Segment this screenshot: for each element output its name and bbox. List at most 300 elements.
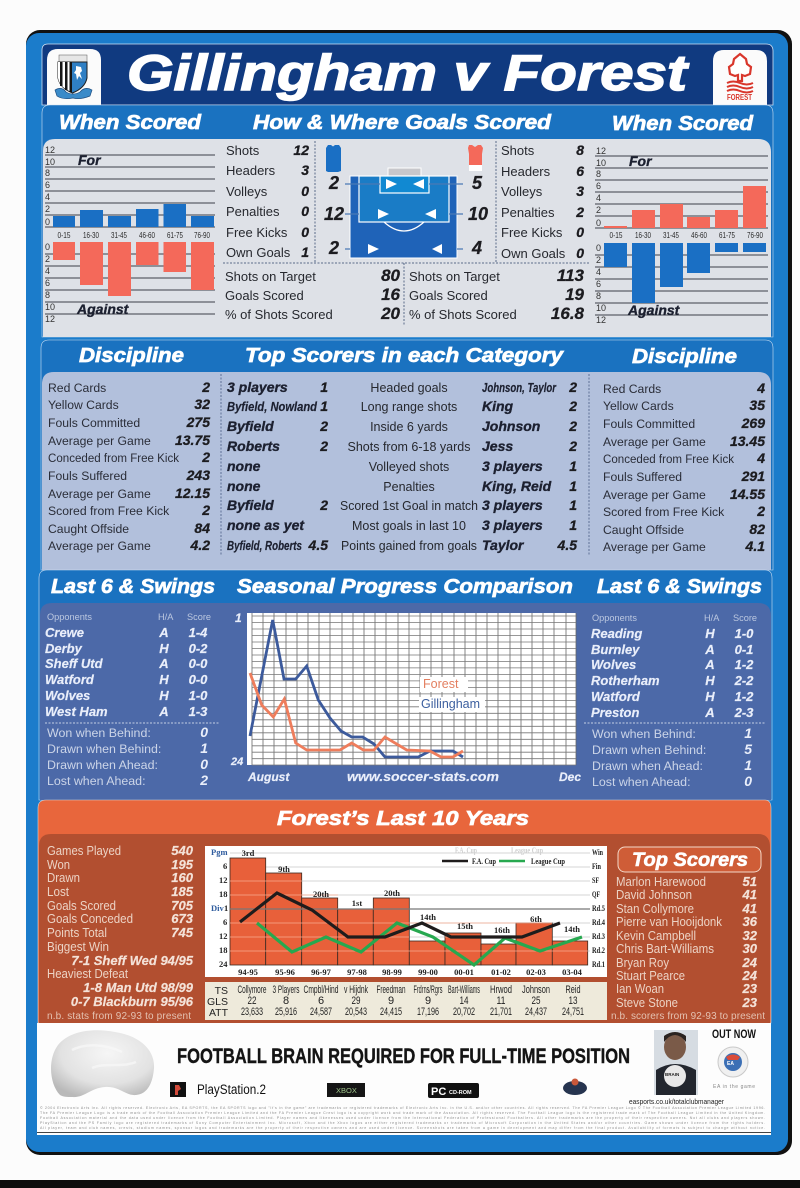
table: top scorers Gillingham: 1	[320, 379, 328, 395]
table: top scorers Gillingham: none	[227, 458, 261, 474]
table: top scorers Forest: 2	[568, 398, 577, 414]
bar chart: Forest when scored: 2	[596, 255, 601, 265]
table: Forest last 6: Won when Behind:	[592, 727, 696, 741]
table: Gillingham discipline: 2	[201, 449, 210, 465]
table: top scorers Forest: 1	[569, 458, 577, 474]
chart: league position and cup progress: SF	[592, 875, 599, 885]
panel: how and where goals scored	[42, 105, 773, 337]
table: Gillingham discipline: Yellow Cards	[48, 398, 119, 412]
table: Gillingham last 6: West Ham	[45, 704, 108, 719]
table: Forest last 6: A	[704, 657, 715, 672]
table: season top scorer, goals, attendance: 24,751	[562, 1006, 584, 1018]
table: Gillingham last 6: Lost when Ahead:	[47, 774, 146, 788]
chart: league position and cup progress: Pgm	[211, 847, 228, 857]
heading: last 6 right: Last 6 & Swings	[597, 576, 762, 598]
chart: league position and cup progress: 3rd	[242, 848, 255, 858]
table: Forest how scored: 0	[576, 224, 584, 240]
table: Gillingham how scored: 12	[293, 142, 309, 158]
chart: league position and cup progress: Fin	[592, 861, 601, 871]
table: Gillingham last 6: Watford	[45, 672, 95, 687]
table: shots totals Forest: 113	[557, 266, 585, 285]
table: Forest last 6: 1-2	[735, 689, 754, 704]
table: all-time top scorers	[611, 847, 765, 1022]
legend: Forest	[420, 677, 468, 692]
table: top scorers Forest: 2	[568, 379, 577, 395]
table: top scorers Forest: 1	[569, 478, 577, 494]
table: Gillingham last 6: Crewe	[45, 625, 84, 640]
table: Gillingham how scored: Shots	[226, 143, 260, 158]
table: all-time top scorers: 36	[743, 914, 758, 929]
table: all-time top scorers: David Johnson	[616, 887, 692, 902]
table: Gillingham discipline: Caught Offside	[48, 522, 129, 536]
table: Forest discipline: 4.1	[745, 538, 765, 554]
table: season top scorer, goals, attendance: Johnson	[522, 984, 550, 996]
chart: league position and cup progress	[205, 845, 607, 977]
bar chart: Forest when scored: 4	[596, 267, 601, 277]
game box	[654, 1030, 698, 1095]
table: season top scorer, goals, attendance: 6	[318, 995, 324, 1007]
table: ten year stats: Goals Conceded	[47, 911, 133, 926]
legend: Gillingham: Gillingham	[421, 697, 480, 711]
heading: discipline right: Discipline	[632, 346, 737, 368]
table: season top scorer, goals, attendance: Collymore	[238, 984, 266, 996]
table: Forest last 6: 1-2	[735, 657, 754, 672]
table: Forest how scored: 3	[576, 183, 584, 199]
table: top scorers Forest: Johnson	[482, 418, 540, 434]
bar chart: Gillingham when scored: 8	[45, 168, 50, 178]
table: Gillingham last 6: Won when Behind:	[47, 726, 151, 740]
web address: easports.co.uk/totalclubmanager	[629, 1097, 724, 1106]
table: Gillingham last 6: Derby	[45, 641, 83, 656]
table: Gillingham discipline: 84	[194, 520, 210, 536]
table: ten year stats: 160	[171, 870, 194, 885]
table: top scorers Gillingham: 1	[320, 398, 328, 414]
table: Gillingham how scored: 1	[301, 244, 309, 260]
logo: Xbox	[327, 1083, 365, 1097]
icon: brain	[51, 1030, 154, 1097]
table: Forest discipline: Caught Offside	[603, 523, 684, 537]
bar chart: Forest when scored: 12	[596, 315, 606, 325]
table: Forest how scored: Own Goals	[501, 246, 566, 261]
table: Forest discipline: Scored from Free Kick	[603, 505, 725, 519]
table: Gillingham last 6: A	[158, 704, 169, 719]
logo: Xbox: XBOX	[336, 1086, 357, 1095]
table: Forest last 6: 5	[744, 741, 752, 757]
bar chart: Forest when scored: 61-75	[719, 231, 735, 240]
table: shots totals Forest: 16.8	[551, 304, 585, 323]
chart: league position and cup progress: 6	[223, 917, 227, 927]
table: Forest last 6: H	[705, 689, 715, 704]
table: Gillingham last 6: 0	[200, 756, 208, 772]
chart: league position and cup progress: 6	[223, 861, 227, 871]
bar chart: Forest when scored: 6	[596, 279, 601, 289]
chart: league position and cup progress: Win	[592, 847, 603, 857]
chart: league position and cup progress: 6th	[530, 914, 542, 924]
bar chart: Forest when scored: 10	[596, 303, 606, 313]
pitch diagram: 10	[468, 204, 488, 224]
table: Gillingham discipline: 13.75	[175, 432, 210, 448]
table: Forest how scored: Shots	[501, 143, 535, 158]
series: Forest	[250, 673, 463, 757]
table: Gillingham discipline: Fouls Committed	[48, 416, 140, 430]
table: Forest discipline: 13.45	[730, 433, 765, 449]
heading: when scored left: When Scored	[59, 112, 202, 134]
table: season top scorer, goals, attendance: Freedman	[376, 984, 406, 996]
chart: league position and cup progress: 02-03	[526, 967, 546, 977]
table: top scorers Gillingham: Byfield	[227, 497, 274, 513]
bar chart: Gillingham when scored: 10	[45, 157, 55, 167]
bar chart: Gillingham when scored: 12	[45, 314, 55, 324]
title banner	[42, 44, 773, 105]
chart: league position and cup progress: Rd.5	[592, 903, 605, 913]
bar chart: Gillingham when scored: 16-30	[83, 231, 99, 240]
chart: league position and cup progress: 20th	[313, 889, 329, 899]
crest: Gillingham	[47, 49, 101, 105]
heading: how and where: How & Where Goals Scored	[253, 112, 552, 134]
table: Gillingham last 6: Sheff Utd	[45, 656, 104, 671]
table: top scorers Forest: 1	[569, 497, 577, 513]
table: Forest discipline: 4	[756, 450, 765, 466]
table: season top scorer, goals, attendance: 25	[532, 995, 540, 1007]
table: Gillingham last 6: A	[158, 656, 169, 671]
legend: Forest: Forest	[423, 677, 459, 691]
table: season top scorer, goals, attendance: 21,701	[490, 1006, 512, 1018]
chart: league position and cup progress: QF	[592, 889, 600, 899]
table: Forest last 6: Lost when Ahead:	[592, 775, 691, 789]
table: scoring categories: Most goals in last 10	[352, 519, 466, 533]
table: Gillingham discipline: Average per Game	[48, 434, 151, 448]
table: ten year stats	[47, 843, 194, 1022]
bar chart: Gillingham when scored: 0	[45, 217, 50, 227]
table: season top scorer, goals, attendance: 24,437	[525, 1006, 547, 1018]
bar chart: Forest when scored: 0	[596, 218, 601, 228]
table: Forest last 6: Reading	[591, 626, 642, 641]
chart: league position and cup progress: Rd.3	[592, 931, 605, 941]
chart: league position and cup progress: 97-98	[347, 967, 367, 977]
table: Gillingham last 6: Drawn when Ahead:	[47, 758, 158, 772]
icon: red shirt	[468, 145, 483, 171]
table: shots totals Gillingham: 80	[381, 266, 401, 285]
chart: league position and cup progress: 95-96	[275, 967, 295, 977]
table: Gillingham last 6: 2	[199, 772, 208, 788]
table: all-time top scorers: n.b. scorers from 92-93 to present	[611, 1011, 765, 1022]
table: Forest discipline: Red Cards	[603, 382, 661, 396]
line chart: seasonal progress: www.soccer-stats.com	[347, 769, 499, 784]
table: top scorers Forest: 3 players	[482, 497, 543, 513]
table: scoring categories: Long range shots	[361, 400, 457, 414]
table: top scorers Forest: 3 players	[482, 458, 543, 474]
table: all-time top scorers: Bryan Roy	[616, 955, 670, 970]
table: Forest how scored: 2	[575, 204, 584, 220]
heading: seasonal progress: Seasonal Progress Comparison	[237, 576, 573, 598]
table: all-time top scorers: 30	[743, 941, 758, 956]
table: scoring categories	[340, 381, 478, 553]
table: Gillingham last 6: 1-3	[189, 704, 208, 719]
chart: league position and cup progress: 12	[219, 875, 228, 885]
table: Forest last 6: Drawn when Ahead:	[592, 759, 703, 773]
table: Gillingham discipline: 12.15	[175, 485, 210, 501]
chart: league position and cup progress: 9th	[278, 864, 290, 874]
table: shots totals Forest	[409, 266, 585, 323]
bar chart: Gillingham when scored: 76-90	[194, 231, 210, 240]
table: season top scorer, goals, attendance: Hrwod	[490, 984, 512, 996]
table: top scorers Gillingham: Roberts	[227, 438, 280, 454]
panel: discipline and top scorers	[41, 340, 773, 570]
table: top scorers Gillingham: 4.5	[308, 537, 328, 553]
table: Gillingham discipline: Average per Game	[48, 487, 151, 501]
table: Gillingham how scored: Headers	[226, 163, 276, 178]
bar chart: Forest when scored: 8	[596, 291, 601, 301]
table: Gillingham how scored: Penalties	[226, 204, 280, 219]
chart: league position and cup progress: 12	[219, 931, 228, 941]
table: Gillingham last 6: H	[159, 688, 169, 703]
small print: All player, team and club names, crests, stadium names, sponsor logos and trademarks are the property of their respective owners and are used under licence. Screenshots are taken from a game in development and may differ from the final product. Availability of formats is subject to change without notice.	[40, 1126, 765, 1130]
chart: league position and cup progress: 01-02	[491, 967, 511, 977]
bar chart: Forest when scored: 46-60	[691, 231, 707, 240]
table: Gillingham discipline: 4.2	[190, 537, 210, 553]
bar chart: Forest when scored: 76-90	[747, 231, 763, 240]
table: Gillingham how scored: Free Kicks	[226, 225, 288, 240]
panel: Forest's last 10 years	[38, 800, 771, 1023]
table: season top scorer, goals, attendance: 9	[388, 995, 394, 1007]
table: Gillingham discipline: Scored from Free Kick	[48, 504, 170, 518]
table: shots totals Gillingham: 16	[381, 285, 401, 304]
heading: when scored right: When Scored	[612, 113, 754, 135]
line chart: seasonal progress: 1	[235, 611, 242, 625]
table: scoring categories: Inside 6 yards	[370, 420, 448, 434]
table: Gillingham discipline: 275	[186, 414, 210, 430]
table: ten year stats: 745	[171, 925, 194, 940]
table: Gillingham discipline: 243	[186, 467, 210, 483]
table: shots totals Forest: Shots on Target	[409, 269, 500, 284]
table: scoring categories: Headed goals	[370, 381, 448, 395]
table: all-time top scorers: Kevin Campbell	[616, 928, 696, 943]
table: Forest discipline	[603, 380, 765, 554]
heading: Forest's last 10 years: Forest’s Last 10 Years	[277, 808, 529, 830]
table: ten year stats: Points Total	[47, 925, 107, 940]
table: top scorers Forest: 3 players	[482, 517, 543, 533]
table: Forest last 6: Preston	[591, 705, 639, 720]
table: season top scorer, goals, attendance: Reid	[566, 984, 580, 996]
table: ten year stats: 540	[171, 843, 194, 858]
chart: league position and cup progress: 15th	[457, 921, 473, 931]
bar chart: Forest when scored: 0	[596, 243, 601, 253]
table: ten year stats: 673	[171, 911, 194, 926]
table: shots totals Gillingham: % of Shots Scored	[225, 307, 333, 322]
bar chart: Gillingham when scored: 12	[45, 145, 55, 155]
chart: league position and cup progress: Rd.1	[592, 959, 605, 969]
table: all-time top scorers: Top Scorers	[632, 850, 748, 871]
table: season top scorer, goals, attendance: 8	[283, 995, 289, 1007]
crest: Nottingham Forest: FOREST	[727, 93, 752, 102]
table: Forest how scored: Free Kicks	[501, 225, 563, 240]
table: Gillingham how scored: 3	[301, 162, 309, 178]
crest: Nottingham Forest	[713, 50, 767, 105]
table: season top scorer, goals, attendance: 20,543	[345, 1006, 367, 1018]
table: top scorers Gillingham: 3 players	[227, 379, 288, 395]
icon: blue shirt	[326, 145, 341, 172]
bar chart: Forest when scored: 2	[596, 205, 601, 215]
table: season top scorer, goals, attendance: 24,587	[310, 1006, 332, 1018]
chart: league position and cup progress: 96-97	[311, 967, 332, 977]
table: season top scorer, goals, attendance: Cmpbl/Hind	[304, 984, 338, 996]
small print: PlayStation and the PS Family logo are registered trademarks of Sony Computer Entertainment Inc. Microsoft, Xbox and the Xbox logos are either registered trademarks or trademarks of Microsoft Corporation in the United States and/or other countries. Game shown under licence from the rights holders.	[40, 1121, 765, 1125]
bar chart: Gillingham when scored: 6	[45, 278, 50, 288]
table: top scorers Forest	[482, 379, 577, 553]
chart: league position and cup progress: Rd.2	[592, 945, 605, 955]
table: all-time top scorers: 41	[742, 887, 757, 902]
table: top scorers Gillingham: 2	[319, 438, 328, 454]
bar chart: Forest when scored: 31-45	[663, 231, 679, 240]
small print	[40, 1106, 765, 1130]
line chart: seasonal progress	[230, 611, 581, 784]
table: Gillingham discipline	[48, 379, 210, 553]
table: season top scorer, goals, attendance: 20,702	[453, 1006, 475, 1018]
pitch diagram: 5	[472, 173, 483, 193]
table: all-time top scorers: Stan Collymore	[616, 901, 694, 916]
table: ten year stats: 0-7 Blackburn 95/96	[71, 994, 194, 1009]
line chart: seasonal progress: 24	[230, 756, 243, 768]
legend: League Cup	[511, 845, 543, 855]
table: Forest how scored: 0	[576, 245, 584, 261]
bar chart: Gillingham when scored: 4	[45, 266, 50, 276]
table: Forest discipline: Average per Game	[603, 488, 706, 502]
chart: league position and cup progress: 00-01	[454, 967, 474, 977]
table: Forest last 6: Rotherham	[591, 673, 660, 688]
bar chart: Forest when scored: 4	[596, 193, 601, 203]
table: season top scorer, goals, attendance	[205, 982, 607, 1020]
chart: league position and cup progress: 24	[219, 959, 228, 969]
bar chart: Forest when scored: 10	[596, 158, 606, 168]
table: top scorers Forest: Johnson, Taylor	[482, 380, 557, 395]
table: Forest last 6: 2-2	[734, 673, 754, 688]
table: Forest how scored: Volleys	[501, 184, 543, 199]
table: Gillingham last 6: 0-0	[189, 672, 208, 687]
table: Gillingham last 6: 0-2	[189, 641, 208, 656]
chart: league position and cup progress: 99-00	[418, 967, 438, 977]
table: Forest last 6: Drawn when Behind:	[592, 743, 706, 757]
bar chart: Forest when scored	[595, 146, 768, 325]
heading: top scorers: Top Scorers in each Category	[245, 345, 564, 367]
table: all-time top scorers: 41	[742, 901, 757, 916]
table: scoring categories: Shots from 6-18 yards	[348, 440, 470, 454]
table: Gillingham last 6: A	[158, 625, 169, 640]
table: Gillingham last 6: H/A	[158, 612, 174, 622]
table: scoring categories: Volleyed shots	[369, 460, 449, 474]
chart: league position and cup progress: 1st	[352, 898, 362, 908]
table: Gillingham discipline: Average per Game	[48, 539, 151, 553]
table: Forest last 6: 1	[744, 757, 752, 773]
table: Forest last 6	[584, 613, 765, 789]
table: all-time top scorers: Chris Bart-Williams	[616, 941, 714, 956]
chart: league position and cup progress: 1	[224, 903, 228, 913]
table: ten year stats: Goals Scored	[47, 898, 116, 913]
table: ten year stats: 1-8 Man Utd 98/99	[83, 980, 194, 995]
logo: PlayStation 2	[170, 1082, 266, 1097]
legend: F.A. Cup	[455, 845, 477, 855]
bar chart: Gillingham when scored: Against	[76, 301, 130, 317]
table: top scorers Forest: 2	[568, 438, 577, 454]
table: all-time top scorers: 51	[743, 874, 757, 889]
small print: The FA Premier League Logo is a trade mark of the Football Association Premier League Limited and the FA Premier League Crest logo is a copyright work and trade mark of the Association. All rights reserved. The Football League logo is the registered trade mark of The Football League Limited in the United Kingdom.	[40, 1111, 765, 1115]
line: League Cup	[257, 923, 582, 965]
table: Forest discipline: 82	[749, 521, 765, 537]
table: Forest last 6: 0-1	[735, 642, 753, 657]
line chart: seasonal progress: August	[247, 770, 290, 784]
bar chart: Gillingham when scored: 0-15	[58, 231, 71, 240]
logo: league badge	[563, 1078, 587, 1095]
bar chart: Forest when scored: 12	[596, 146, 606, 156]
small print: © 2004 Electronic Arts Inc. All rights reserved. Electronic Arts, EA SPORTS, the EA SPORTS logo and "It's in the game" are trademarks or registered trademarks of Electronic Arts Inc. in the U.S. and/or other countries. All rights reserved. The FA Premier League Logo © The Football Association Premier League Limited 1996.	[40, 1106, 765, 1110]
table: Gillingham last 6: 1-4	[189, 625, 208, 640]
table: shots totals Gillingham: 20	[380, 304, 401, 323]
table: shots totals Forest: % of Shots Scored	[409, 307, 517, 322]
table: Gillingham last 6	[45, 612, 220, 788]
table: Forest how scored: 6	[576, 163, 584, 179]
pitch diagram	[223, 141, 590, 325]
main title text: Gillingham v Forest	[127, 45, 690, 101]
table: scoring categories: Points gained from goals	[341, 539, 477, 553]
table: Gillingham last 6: Wolves	[45, 688, 90, 703]
table: Forest last 6: 1	[744, 725, 752, 741]
table: Forest last 6: A	[704, 642, 715, 657]
bar chart: Gillingham when scored: 31-45	[111, 231, 127, 240]
table: top scorers Gillingham: 2	[319, 418, 328, 434]
table: Forest discipline: Average per Game	[603, 540, 706, 554]
table: season top scorer, goals, attendance: v Hijdnk	[344, 984, 368, 996]
table: top scorers Forest: 2	[568, 418, 577, 434]
table: Gillingham how scored: Volleys	[226, 184, 268, 199]
table: top scorers Forest: Taylor	[482, 537, 525, 553]
table: all-time top scorers: 23	[742, 995, 758, 1010]
out now: OUT NOW	[712, 1027, 757, 1041]
bar chart: Gillingham when scored	[45, 145, 215, 324]
table: top scorers Gillingham	[227, 379, 328, 553]
table: Forest discipline: Average per Game	[603, 435, 706, 449]
pitch diagram: 2	[328, 238, 339, 258]
table: Forest how scored: Penalties	[501, 205, 555, 220]
table: Gillingham last 6: 1	[200, 740, 208, 756]
table: Gillingham how scored: 0	[301, 203, 309, 219]
table: Gillingham last 6: Score	[187, 612, 211, 622]
game box: BRAIN	[665, 1072, 679, 1077]
logo: PC CD-ROM: CD-ROM	[449, 1090, 472, 1096]
table: season top scorer, goals, attendance: ATT	[209, 1007, 229, 1019]
table: all-time top scorers: Steve Stone	[616, 995, 678, 1010]
table: season top scorer, goals, attendance: 9	[425, 995, 431, 1007]
bar chart: Gillingham when scored: 8	[45, 290, 50, 300]
table: Forest last 6: 1-0	[735, 626, 754, 641]
small print: Football Association material and the data used under licence from the Football Association Limited. Player names and likenesses used under licence from the International Federation of Professional Footballers. All other trademarks are the property of their respective owners. Not all clubs and players shown.	[40, 1116, 765, 1120]
table: shots totals Gillingham	[225, 266, 401, 323]
table: top scorers Forest: King, Reid	[482, 478, 552, 494]
bar chart: Gillingham when scored: 6	[45, 180, 50, 190]
line chart: seasonal progress: Dec	[559, 770, 581, 784]
heading: discipline left: Discipline	[79, 345, 184, 367]
chart: league position and cup progress: 18	[219, 889, 228, 899]
table: all-time top scorers: Ian Woan	[616, 981, 664, 996]
bar chart: Forest when scored: Against	[627, 302, 681, 318]
table: scoring categories: Penalties	[383, 480, 435, 494]
table: top scorers Gillingham: Byfield, Nowland	[227, 399, 318, 414]
table: Forest last 6: Burnley	[591, 642, 640, 657]
logo: EA Sports	[713, 1047, 755, 1090]
bar chart: Gillingham when scored: 2	[45, 254, 50, 264]
table: ten year stats: n.b. stats from 92-93 to present	[47, 1011, 191, 1022]
logo: PC CD-ROM: PC	[431, 1086, 446, 1098]
table: Forest discipline: Conceded from Free Kick	[603, 452, 735, 466]
table: season top scorer, goals, attendance: 13	[568, 995, 578, 1007]
